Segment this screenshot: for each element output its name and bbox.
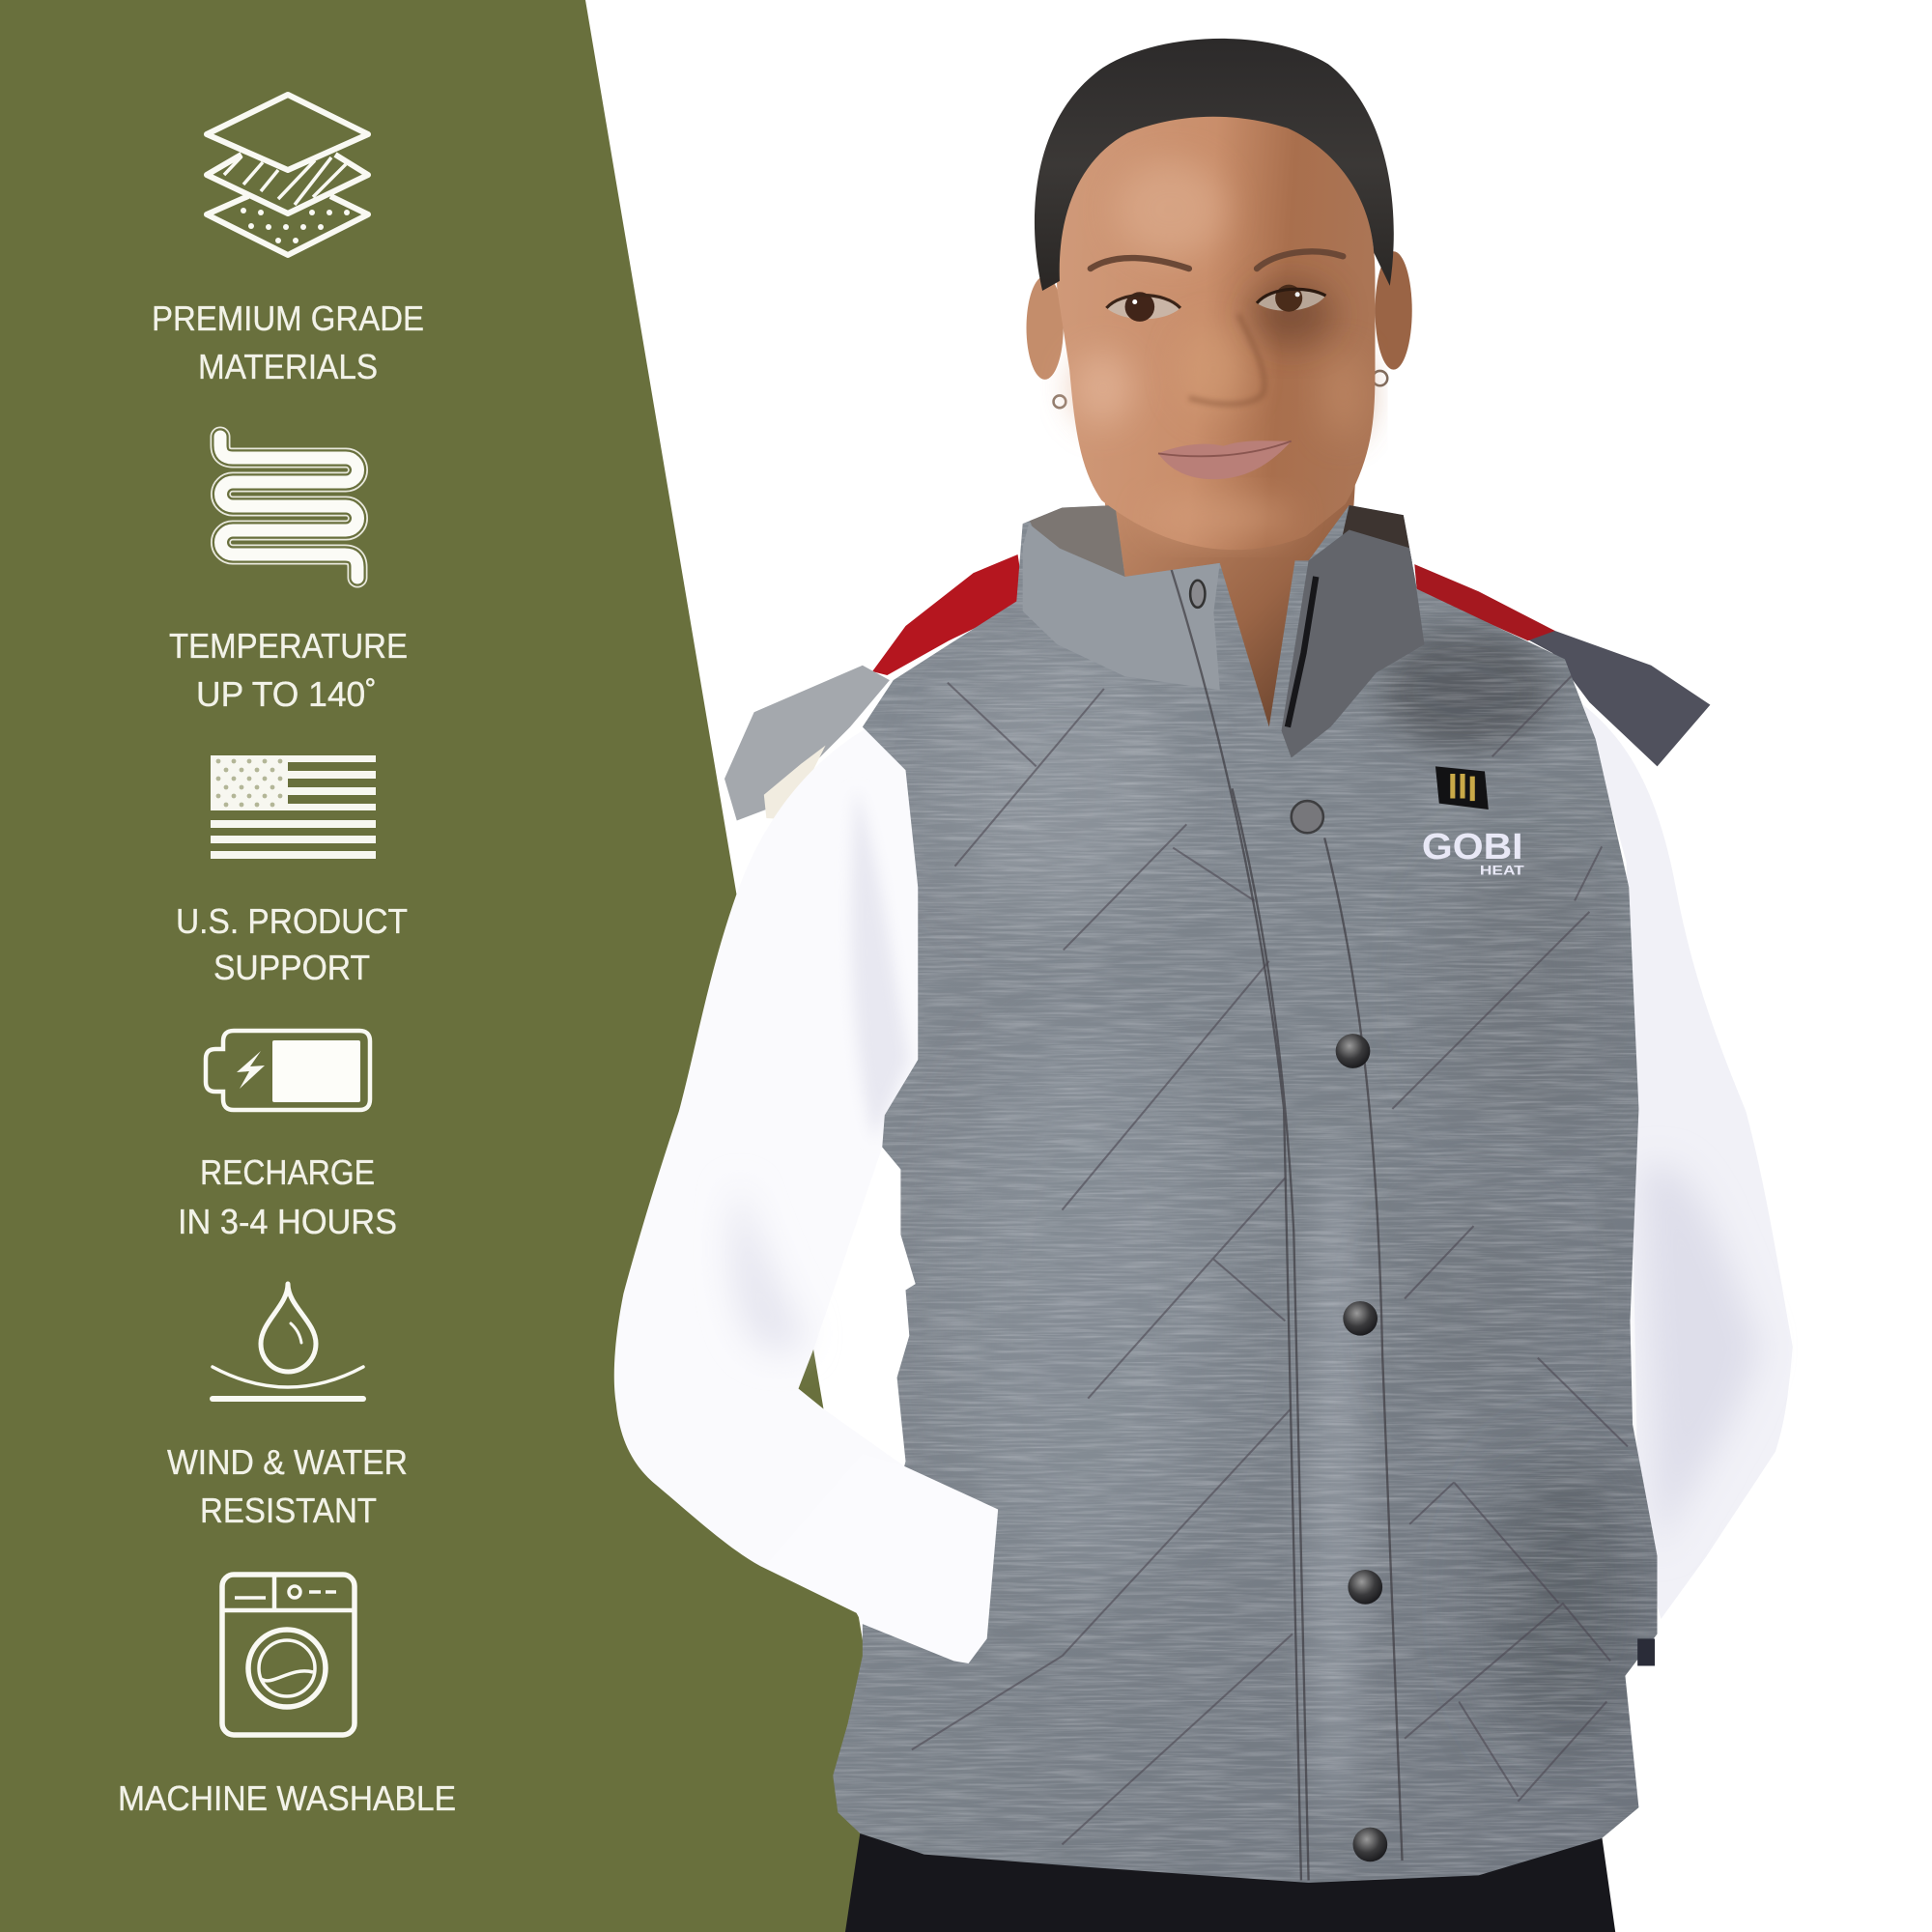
text: recharge: RECHARGE (200, 1152, 375, 1192)
forearm and hand tucked into pocket (764, 1454, 998, 1663)
panel: green slanted sidebar (0, 0, 912, 1932)
icon: charging battery (206, 1031, 370, 1110)
inner collar lining (1030, 505, 1412, 577)
fabric heather texture (813, 493, 1676, 1897)
logo: gobi heat: GOBI (1422, 826, 1523, 867)
eyes (1106, 285, 1325, 322)
text: wind and water: WIND & WATER (167, 1442, 408, 1482)
hair (1035, 39, 1394, 291)
eyebrows (1091, 251, 1343, 269)
icon: washing machine (222, 1575, 355, 1735)
face highlights (1072, 160, 1365, 537)
usb connector tag (1435, 766, 1489, 810)
text: wind and water (167, 1442, 408, 1530)
text: temperature (169, 626, 408, 714)
sleeve: left arm (614, 727, 998, 1663)
text: recharge: IN 3-4 HOURS (178, 1202, 397, 1241)
text: wind and water: RESISTANT (200, 1491, 377, 1530)
ears (1026, 251, 1412, 408)
nose (1189, 314, 1264, 404)
placket seams (1171, 567, 1403, 1880)
icon: material layers (207, 95, 368, 255)
text: recharge (178, 1152, 397, 1241)
logo: gobi heat: HEAT (1480, 863, 1524, 878)
lips (1158, 440, 1292, 479)
text: premium grade materials: MATERIALS (198, 347, 378, 386)
sleeve: right arm (1583, 705, 1793, 1619)
small dark side label (1637, 1638, 1655, 1665)
zipper (1288, 577, 1316, 727)
head (1026, 39, 1412, 550)
icon: water drop (213, 1284, 363, 1399)
collar left (1023, 524, 1220, 690)
text: us product support (176, 901, 408, 987)
photo: woman wearing heated vest (614, 39, 1793, 1932)
icon: heating element coil (220, 437, 357, 578)
hood: collapsed behind shoulders (724, 554, 1710, 820)
snap buttons (1190, 581, 1387, 1861)
vest (813, 493, 1676, 1897)
neck (1103, 480, 1355, 739)
feature list (118, 95, 456, 1818)
face (1057, 112, 1375, 550)
text: us product support: SUPPORT (213, 948, 370, 987)
text: us product support: U.S. PRODUCT (176, 901, 408, 941)
pants (845, 1833, 1615, 1932)
icon: american flag (211, 755, 376, 859)
collar right and zipper panel (1282, 529, 1424, 757)
quilting stitch lines (912, 672, 1628, 1844)
text: machine washable: MACHINE WASHABLE (118, 1778, 456, 1818)
text: premium grade materials: PREMIUM GRADE (152, 298, 424, 338)
text: premium grade materials (152, 298, 424, 386)
text: temperature: TEMPERATURE (169, 626, 408, 666)
shading on vest (949, 629, 1638, 1824)
text: temperature: UP TO 140˚ (196, 674, 377, 714)
